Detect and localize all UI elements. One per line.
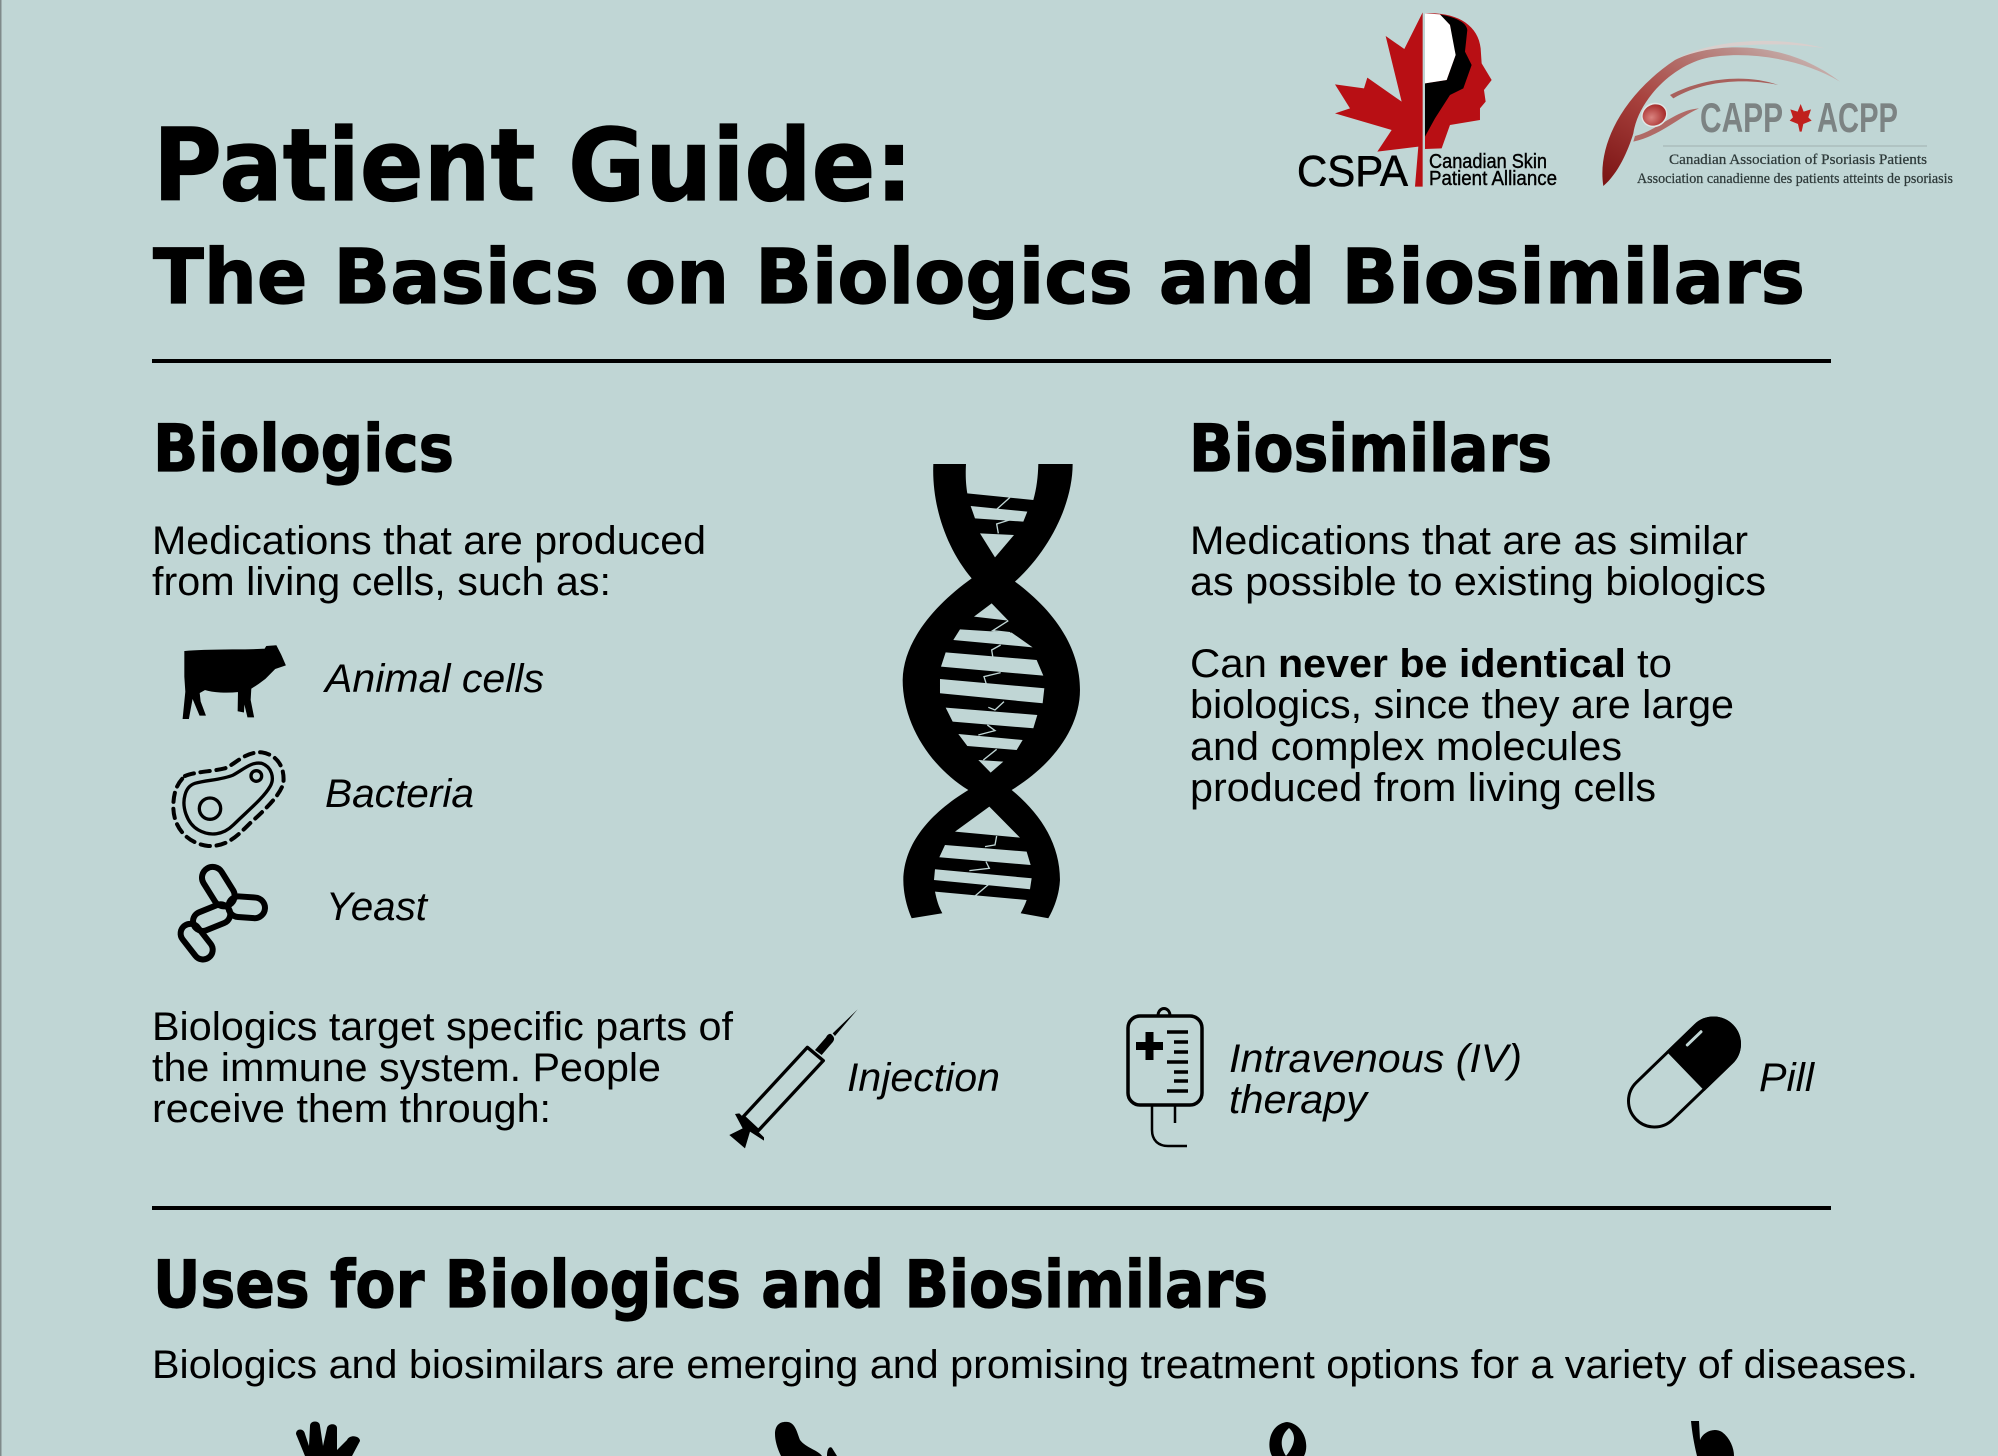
- text: delivery intro: the immune system. People: [152, 1046, 661, 1090]
- text: never identical: produced from living cells: [1190, 766, 1656, 810]
- icon: pill: [1617, 1005, 1752, 1139]
- icon: cow: [183, 646, 285, 718]
- text: never identical: to: [1637, 642, 1672, 686]
- text: biosimilars definition: Medications that are as similar: [1190, 519, 1748, 563]
- text: never identical: and complex molecules: [1190, 725, 1622, 769]
- logo: CSPA: [1297, 12, 1557, 196]
- text: never identical: [1190, 642, 1734, 810]
- text: biosimilars definition: [1190, 519, 1766, 604]
- icon: joint: [775, 1422, 837, 1456]
- icon: organ: [1691, 1421, 1734, 1456]
- heading: uses: Uses for Biologics and Biosimilars: [153, 1248, 1268, 1323]
- icon: ribbon: [1269, 1422, 1306, 1456]
- text: never identical: never be identical: [1278, 642, 1626, 686]
- label: intravenous therapy: [1229, 1037, 1522, 1122]
- label: intravenous therapy: therapy: [1229, 1078, 1370, 1122]
- logo: CSPA: CSPA: [1297, 147, 1409, 196]
- logo: CAPP ACPP: Association canadienne des patients atteints de psoriasis: [1637, 171, 1953, 187]
- logo: CAPP ACPP: CAPP: [1700, 94, 1783, 141]
- label: intravenous therapy: Intravenous (IV): [1229, 1037, 1522, 1081]
- text: delivery intro: receive them through:: [152, 1087, 551, 1131]
- logo: CAPP ACPP: ACPP: [1817, 94, 1898, 141]
- heading: biosimilars: Biosimilars: [1189, 412, 1552, 487]
- logo: CAPP ACPP: [1602, 41, 1953, 187]
- panel: biosimilars: [1189, 412, 1766, 810]
- title: Patient Guide:: [153, 107, 913, 224]
- icon: yeast: [177, 863, 266, 963]
- icon: DNA helix: [903, 464, 1080, 918]
- heading: biologics: Biologics: [153, 412, 454, 487]
- icon: bacteria: [173, 752, 284, 846]
- panel: biologics: [152, 412, 706, 963]
- logo: CAPP ACPP: Canadian Association of Psoriasis Patients: [1669, 152, 1927, 168]
- text: biosimilars definition: as possible to existing biologics: [1190, 560, 1766, 604]
- text: never identical: Can: [1190, 642, 1267, 686]
- label: injection: Injection: [847, 1056, 1000, 1100]
- text: biologics definition: from living cells, such as:: [152, 560, 611, 604]
- label: yeast: Yeast: [326, 885, 429, 929]
- title: The Basics on Biologics and Biosimilars: [153, 232, 1805, 321]
- label: animal cells: Animal cells: [323, 657, 544, 701]
- label: pill: Pill: [1759, 1056, 1815, 1100]
- logo: CSPA: Canadian Skin: [1429, 151, 1547, 173]
- text: uses intro: Biologics and biosimilars are emerging and promising treatment options for a variety of diseases.: [152, 1343, 1918, 1387]
- text: biologics definition: Medications that are produced: [152, 519, 706, 563]
- text: delivery intro: [152, 1005, 734, 1131]
- text: never identical: biologics, since they are large: [1190, 683, 1734, 727]
- icon: IV bag: [1128, 1008, 1202, 1146]
- text: delivery intro: Biologics target specific parts of: [152, 1005, 734, 1049]
- label: bacteria: Bacteria: [325, 772, 474, 816]
- text: biologics definition: [152, 519, 706, 604]
- logo: CSPA: Patient Alliance: [1429, 168, 1557, 190]
- icon: hand: [296, 1422, 360, 1456]
- title: [153, 107, 1805, 321]
- icon: syringe: [729, 1009, 858, 1148]
